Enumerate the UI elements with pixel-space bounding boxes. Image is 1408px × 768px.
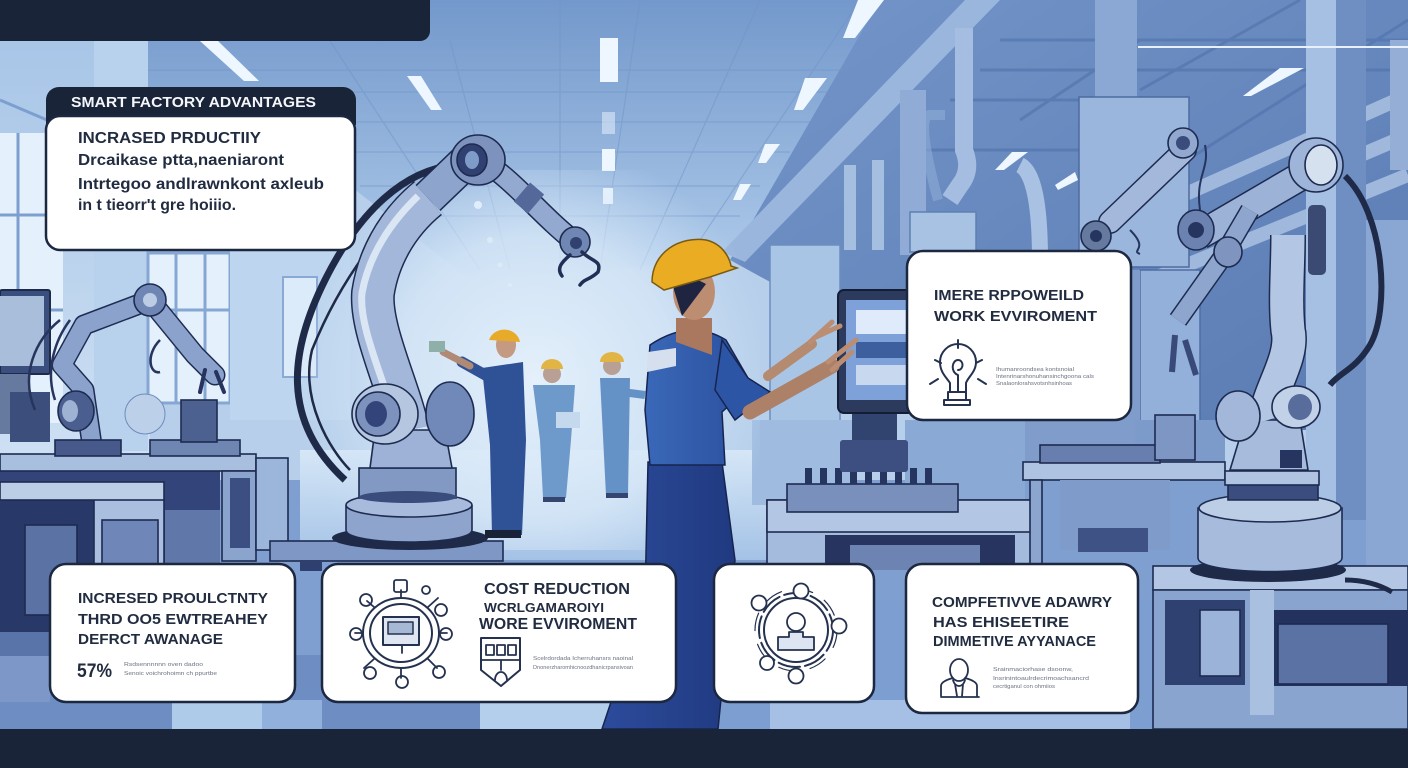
heading: THRD OO5 EWTREAHEY bbox=[78, 612, 268, 628]
worker left bbox=[429, 330, 526, 538]
bench machine bbox=[150, 440, 240, 456]
side monitor bbox=[0, 290, 50, 374]
lower floor tones bbox=[0, 655, 680, 729]
cables bbox=[297, 165, 455, 480]
background columns and cabinets bbox=[752, 0, 1408, 570]
heading: competitive advantage bbox=[932, 595, 1112, 650]
worker right bbox=[600, 352, 645, 498]
caption bbox=[996, 367, 1094, 387]
text block: increased productivity bbox=[78, 130, 324, 214]
head bbox=[676, 318, 712, 355]
panel: icon tile bbox=[714, 564, 874, 702]
left workbenches bbox=[0, 290, 503, 702]
ceiling bbox=[148, 0, 900, 280]
right ceiling bbox=[730, 0, 1408, 430]
left wall and windows bbox=[0, 0, 350, 480]
gripper bbox=[560, 252, 599, 285]
caption: Rsdsennnnnn oven dadoo bbox=[124, 662, 203, 668]
panel: increased productivity stat bbox=[50, 564, 295, 702]
lower arm bbox=[373, 198, 428, 430]
tablet bbox=[838, 290, 916, 413]
caption bbox=[533, 656, 633, 671]
background workers bbox=[429, 330, 645, 538]
heading: DEFRCT AWANAGE bbox=[78, 632, 223, 648]
text block: increased productivity: Drcaikase ptta,naeniaront bbox=[78, 152, 284, 169]
arms bbox=[750, 366, 832, 412]
heading: competitive advantage: DIMMETIVE AYYANACE bbox=[933, 634, 1096, 650]
right robot arm bbox=[1153, 138, 1408, 729]
arm bbox=[1267, 235, 1289, 420]
caption: Ihumanroondsea kontsnoial bbox=[996, 367, 1074, 373]
central machine table bbox=[767, 412, 1225, 570]
icon: shield bbox=[481, 638, 520, 686]
table bbox=[1153, 566, 1408, 590]
heading: cost reduction: COST REDUCTION bbox=[484, 581, 630, 598]
icon: gear network bbox=[350, 580, 452, 688]
heading: work environment: WORK EVVIROMENT bbox=[934, 309, 1097, 325]
heading: cost reduction: WCRLGAMAROIYI bbox=[484, 600, 604, 615]
caption bbox=[993, 667, 1089, 690]
ceiling lights bbox=[200, 0, 1304, 287]
text block: increased productivity: in t tieorr't gre hoiiio. bbox=[78, 197, 236, 214]
bottom bar bbox=[0, 729, 1408, 768]
icon: light bulb bbox=[930, 340, 986, 405]
caption: Scelrdordada Icherruhansrs naoinal bbox=[533, 656, 633, 662]
centre robot arm bbox=[297, 135, 599, 550]
caption: Intenrinarshonuhansinchgoona cals bbox=[996, 374, 1094, 380]
panel: competitive advantage bbox=[906, 564, 1138, 713]
panel: cost reduction bbox=[322, 564, 676, 702]
icon: person bbox=[941, 659, 979, 697]
caption: Dnonerzharomhicnoozdhanicrpansivoan bbox=[533, 665, 633, 671]
right ducts and stripes bbox=[850, 28, 1408, 280]
heading: cost reduction: WORE EVVIROMENT bbox=[479, 616, 638, 633]
trousers bbox=[602, 462, 735, 729]
forearm bbox=[480, 160, 575, 242]
caption: Senoic voichrohoimn ch ppurtbe bbox=[124, 671, 217, 677]
floor bbox=[0, 480, 1408, 729]
caption: Srainmaciorhase dsoonw, bbox=[993, 667, 1074, 673]
caption: Insrinintoaulrdecrimoachsancrd bbox=[993, 676, 1089, 682]
diagonal roof beam bbox=[722, 0, 1000, 262]
central glow bbox=[300, 170, 760, 550]
left robot arm bbox=[29, 284, 224, 456]
heading bbox=[78, 591, 268, 648]
stat: 57%: 57% bbox=[77, 661, 112, 682]
worker middle bbox=[533, 359, 580, 502]
heading: cost reduction bbox=[479, 581, 638, 633]
heading: competitive advantage: HAS EHISEETIRE bbox=[933, 615, 1069, 631]
heading: smart factory advantages: SMART FACTORY ADVANTAGES bbox=[71, 94, 316, 111]
heading: competitive advantage: COMPFETIVVE ADAWRY bbox=[932, 595, 1112, 611]
caption bbox=[124, 662, 217, 677]
icon: engineer in cycle bbox=[752, 584, 846, 684]
shirt bbox=[645, 330, 752, 465]
text block: increased productivity: INCRASED PRDUCTIIY bbox=[78, 130, 262, 147]
base bbox=[1190, 558, 1346, 582]
heading: INCRESED PROULCTNTY bbox=[78, 591, 268, 607]
panel: smart factory advantages bbox=[46, 87, 356, 250]
text block: increased productivity: Intrtegoo andlrawnkont axleub bbox=[78, 176, 324, 193]
joint bbox=[426, 382, 474, 446]
caption: cecrtiganul con ohmiios bbox=[993, 684, 1055, 690]
main worker with tablet bbox=[602, 239, 916, 729]
caption: Snalaonlorahsvotsnhsinhoas bbox=[996, 381, 1072, 387]
heading: work environment: IMERE RPPOWEILD bbox=[934, 288, 1084, 304]
far right robot arm bbox=[1081, 128, 1206, 254]
heading: work environment bbox=[934, 288, 1097, 325]
base bbox=[332, 526, 488, 550]
panel: improved work environment bbox=[907, 251, 1131, 420]
top left header bar bbox=[0, 0, 430, 41]
